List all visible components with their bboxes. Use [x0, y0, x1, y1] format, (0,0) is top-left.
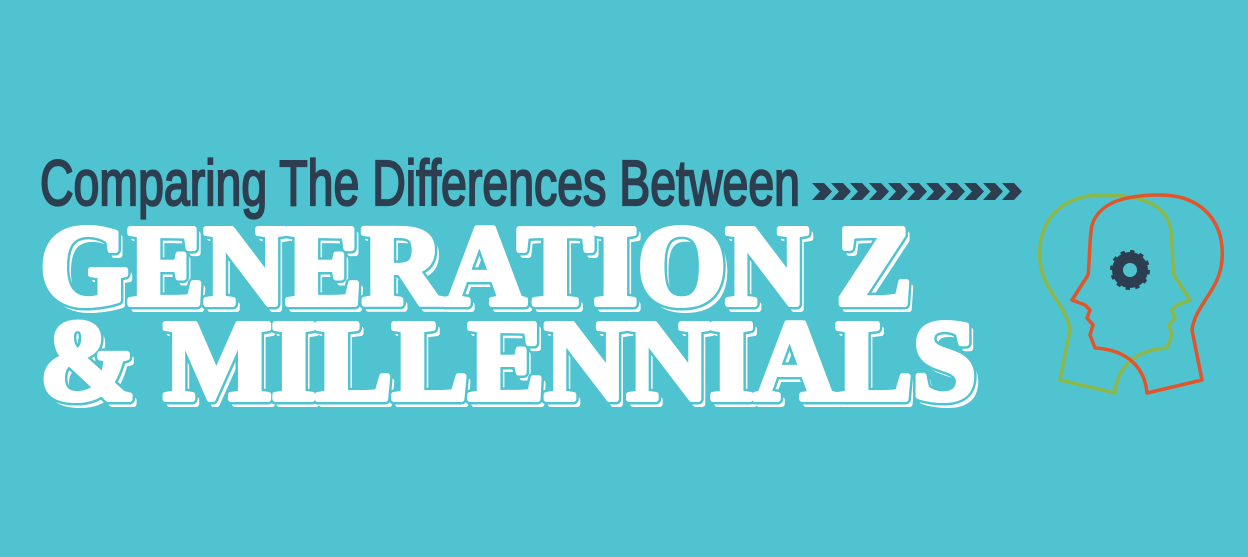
title: millennials: & MILLENNIALS — [40, 297, 976, 424]
title: generation z: GENERATION Z — [40, 202, 912, 329]
title: millennials: & MILLENNIALS — [40, 297, 976, 424]
icon: heads with gear — [1040, 195, 1222, 393]
title: millennials: & MILLENNIALS — [44, 302, 980, 429]
title: generation z: GENERATION Z — [44, 207, 916, 334]
subtitle: Comparing The Differences Between — [40, 147, 800, 219]
title: generation z: GENERATION Z — [40, 202, 912, 329]
arrow: chevrons — [812, 183, 1022, 200]
